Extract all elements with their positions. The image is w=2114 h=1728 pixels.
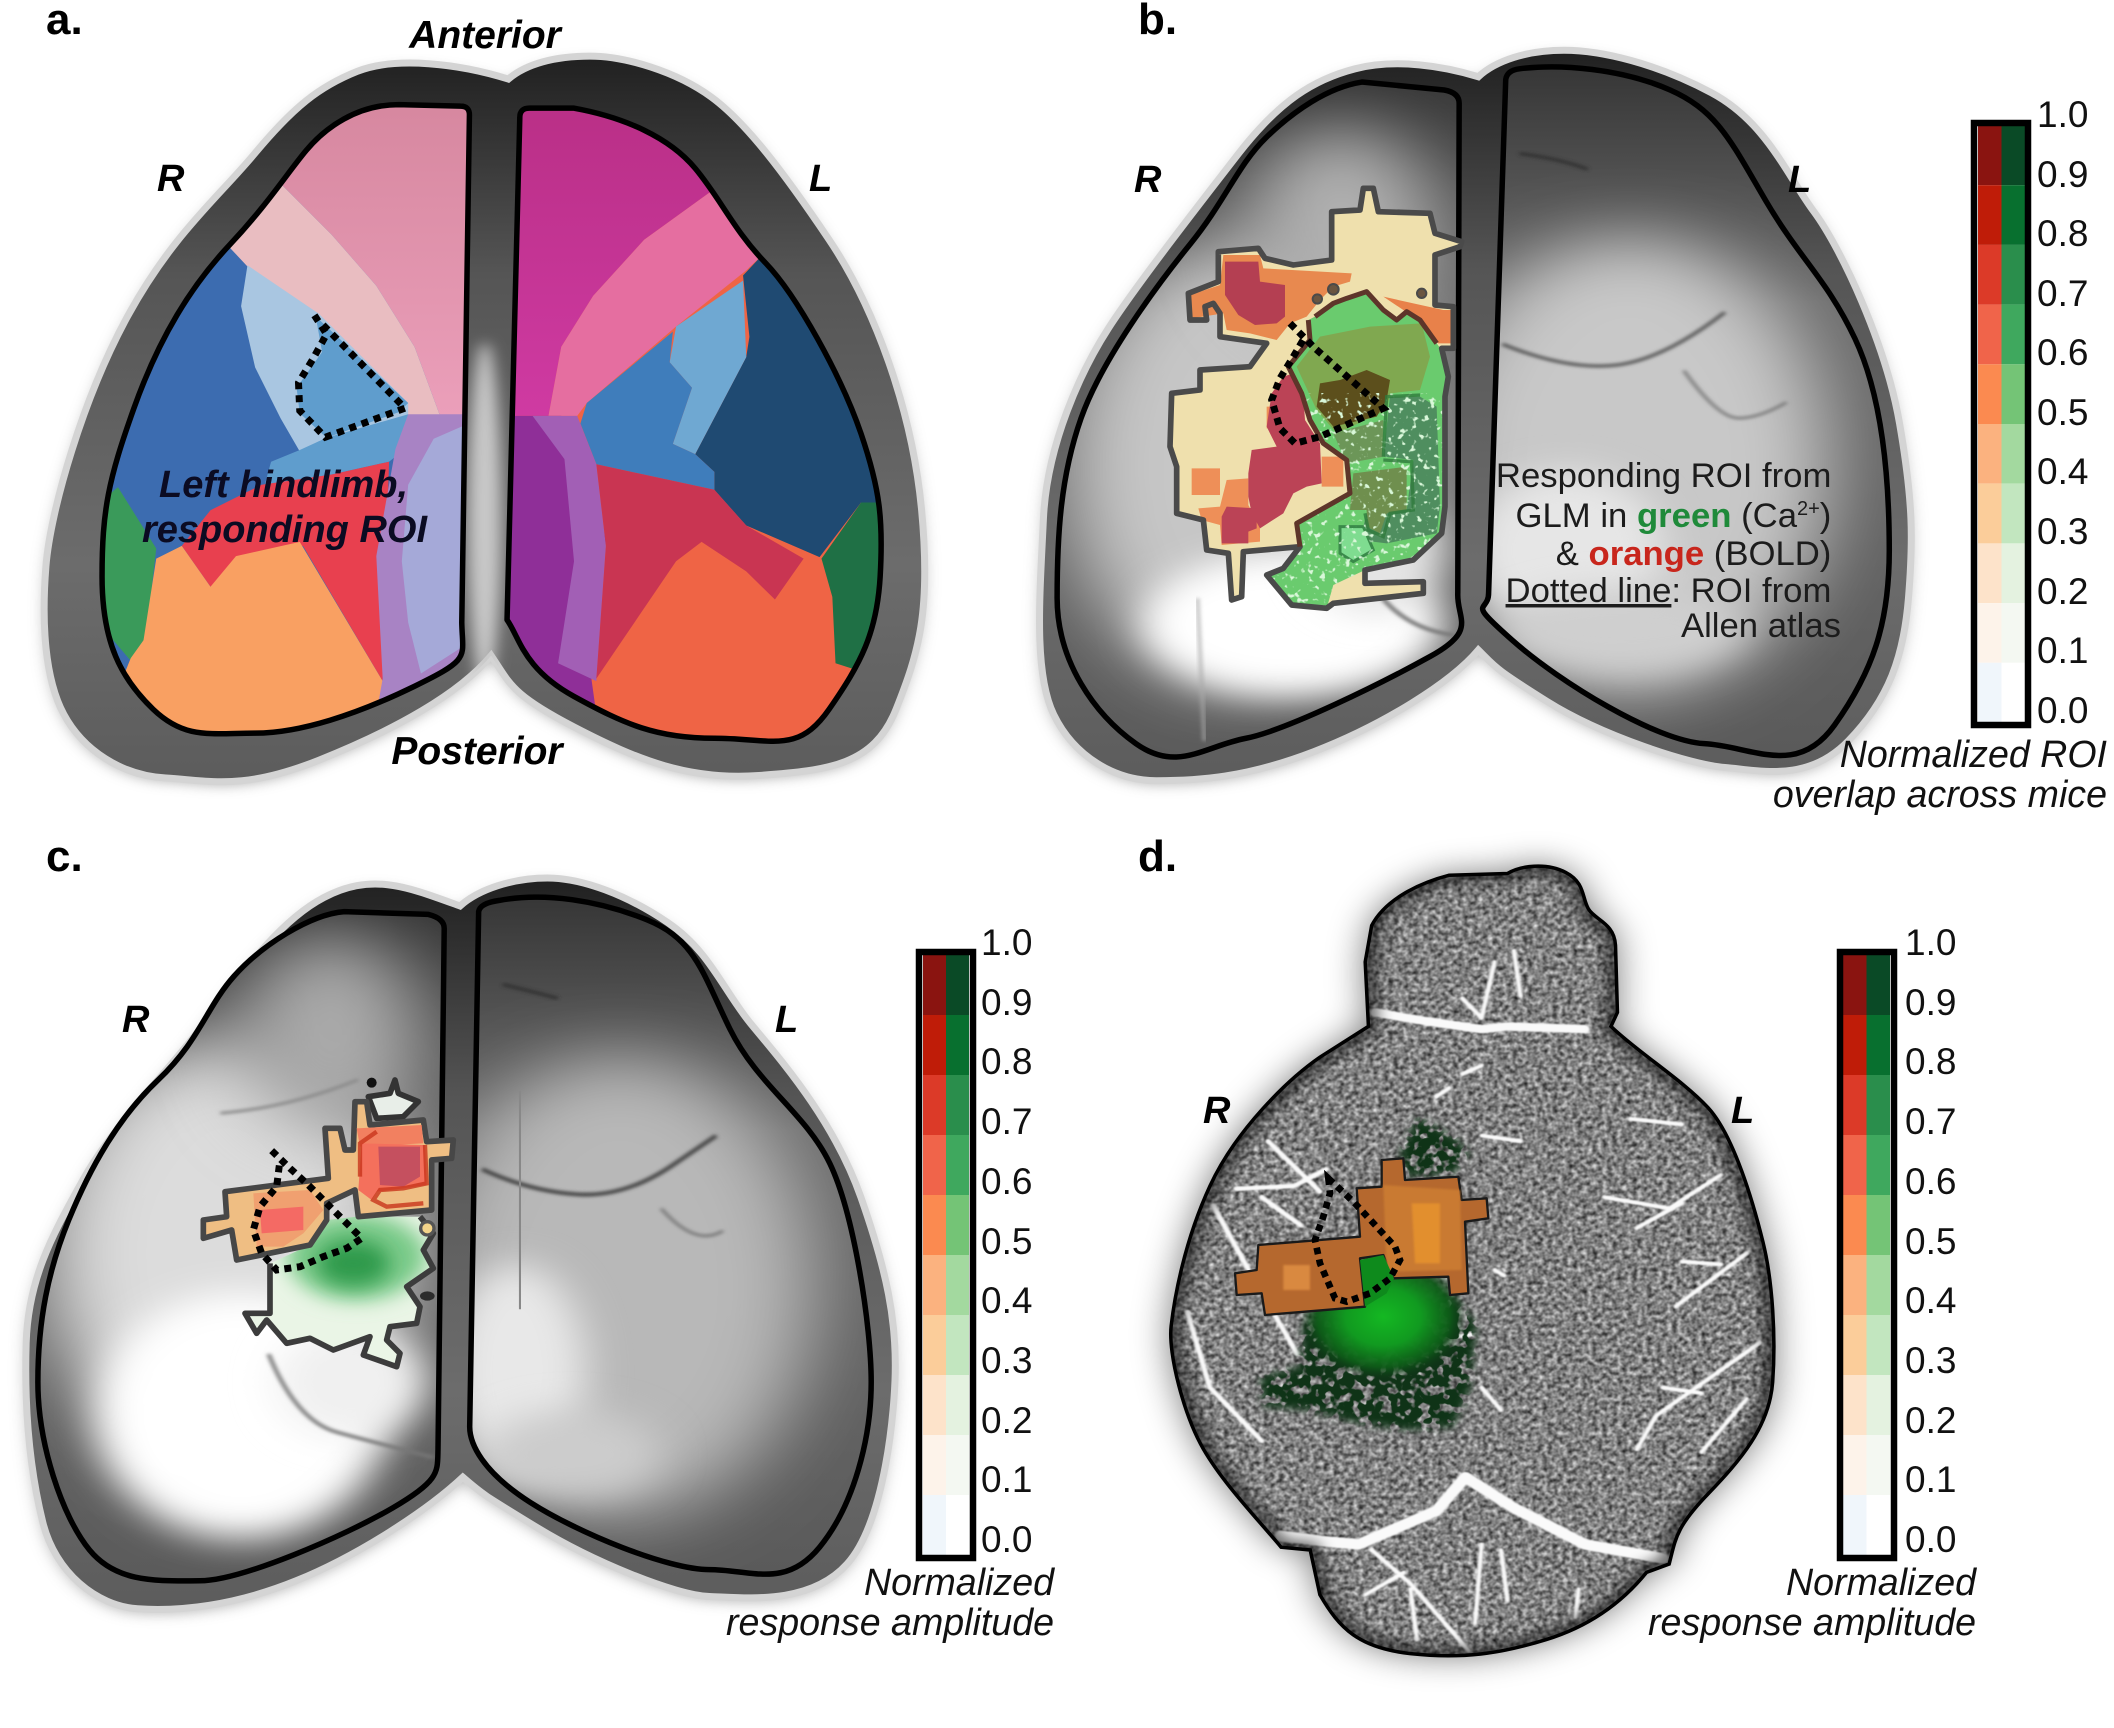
colorbar d: 0.5 <box>1905 1221 1956 1262</box>
calcium ROI map <box>1263 290 1450 610</box>
colorbar c: 0.3 <box>981 1340 1032 1381</box>
ROI overlay c <box>203 1078 453 1370</box>
label: Left hindlimb responding ROI: Left hindlimb, <box>159 464 408 506</box>
colorbar b: 0.0 <box>2037 690 2088 731</box>
colorbar c: 0.4 <box>981 1280 1032 1321</box>
orange BOLD response c <box>203 1102 453 1260</box>
annotation text b: GLM in green (Ca <box>1516 497 1797 535</box>
colorbar caption c: response amplitude <box>726 1601 1054 1643</box>
shadow b <box>1040 55 1911 785</box>
dotted ROI c <box>253 1151 362 1270</box>
colorbar caption d: response amplitude <box>1648 1601 1976 1643</box>
annotation text b: Responding ROI from <box>1496 457 1831 495</box>
colorbar caption b: Normalized ROI <box>1840 733 2108 775</box>
annotation text b: Allen atlas <box>1681 607 1841 645</box>
dotted ROI b <box>1272 323 1383 443</box>
colorbar d: 0.7 <box>1905 1101 1956 1142</box>
panel c: response amplitude on widefield <box>21 878 1055 1643</box>
brain image c <box>21 878 895 1614</box>
label L: L <box>809 158 832 200</box>
colorbar caption d: Normalized <box>1786 1561 1977 1603</box>
colorbar b: 1.0 <box>2037 94 2088 135</box>
colorbar c: 0.1 <box>981 1459 1032 1500</box>
top pale patch c <box>367 1078 418 1118</box>
colorbar b: 0.8 <box>2037 213 2088 254</box>
label R: R <box>1203 1090 1231 1132</box>
MRI brain group <box>1158 856 1786 1668</box>
small brown spots <box>1313 284 1426 304</box>
colorbar c: 0.6 <box>981 1161 1032 1202</box>
atlas hemisphere outlines <box>102 105 881 741</box>
hemisphere outlines b <box>1057 67 1889 757</box>
colorbar d <box>1840 922 1956 1560</box>
label R: R <box>1134 159 1162 201</box>
left hemisphere regions <box>510 110 878 738</box>
colorbar b: 0.9 <box>2037 154 2088 195</box>
label L: L <box>1731 1090 1754 1132</box>
annotation text b: 2+ <box>1797 498 1820 520</box>
panel d: MRI response map <box>1158 856 1977 1668</box>
annotation text b: Dotted line: ROI from <box>1506 572 1831 610</box>
label L: L <box>775 999 798 1041</box>
colorbar c: 0.0 <box>981 1519 1032 1560</box>
annotation text b: & orange (BOLD) <box>1556 535 1831 573</box>
colorbar d: 0.4 <box>1905 1280 1956 1321</box>
colorbar c: 0.5 <box>981 1221 1032 1262</box>
label Posterior: Posterior <box>391 730 564 773</box>
panel b: ROI overlap <box>1040 50 2108 815</box>
panel label d: d. <box>1138 832 1177 881</box>
colorbar b: 0.2 <box>2037 571 2088 612</box>
shadow c <box>26 882 895 1614</box>
green calcium peak d <box>1300 1253 1467 1380</box>
ROI overlay d <box>1235 1110 1488 1437</box>
colorbar b: 0.6 <box>2037 332 2088 373</box>
colorbar b: 0.3 <box>2037 511 2088 552</box>
brain image b <box>1040 50 1911 785</box>
label Anterior: Anterior <box>408 14 563 57</box>
dotted ROI d <box>1315 1178 1400 1302</box>
colorbar caption b: overlap across mice <box>1773 773 2107 815</box>
BOLD ROI map <box>1170 188 1462 608</box>
orange BOLD response d <box>1235 1158 1488 1315</box>
shadow d <box>1171 866 1774 1656</box>
green calcium response c <box>240 1213 440 1370</box>
colorbar b <box>1974 94 2088 731</box>
ROI outline gray <box>1170 188 1462 608</box>
brain outline a <box>44 56 925 782</box>
colorbar d: 0.0 <box>1905 1519 1956 1560</box>
panel a: atlas parcellation <box>44 14 925 786</box>
dark green inner contour <box>1365 395 1420 537</box>
colorbar c: 0.9 <box>981 982 1032 1023</box>
green ROI boundary <box>1288 292 1437 547</box>
colorbar d: 0.1 <box>1905 1459 1956 1500</box>
colorbar d: 0.3 <box>1905 1340 1956 1381</box>
left hemisphere image b <box>1485 70 1884 725</box>
colorbar b: 0.7 <box>2037 273 2088 314</box>
colorbar d: 0.6 <box>1905 1161 1956 1202</box>
ROI overlay b <box>1170 188 1462 610</box>
colorbar c: 0.8 <box>981 1041 1032 1082</box>
brain outline c <box>26 878 895 1609</box>
right hemisphere image b <box>1060 85 1459 742</box>
colorbar d: 0.2 <box>1905 1400 1956 1441</box>
dark speckled response area <box>1253 1110 1487 1437</box>
brain with atlas regions a <box>44 56 925 786</box>
shadow a <box>44 60 925 786</box>
brain outline b <box>1040 50 1911 781</box>
label R: R <box>122 999 150 1041</box>
MRI outline d <box>1171 866 1774 1656</box>
colorbar d: 0.8 <box>1905 1041 1956 1082</box>
panel label c: c. <box>46 832 83 881</box>
label: Left hindlimb responding ROI: responding ROI <box>142 509 428 551</box>
hemisphere outlines c <box>38 897 871 1581</box>
colorbar c: 0.2 <box>981 1400 1032 1441</box>
annotation text b: ) <box>1820 497 1831 535</box>
colorbar b: 0.5 <box>2037 392 2088 433</box>
colorbar caption c: Normalized <box>864 1561 1055 1603</box>
colorbar d: 0.9 <box>1905 982 1956 1023</box>
label R: R <box>157 158 185 200</box>
MRI brain image <box>1158 856 1786 1668</box>
colorbar c: 1.0 <box>981 922 1032 963</box>
colorbar d: 1.0 <box>1905 922 1956 963</box>
dotted ROI a <box>298 315 405 437</box>
colorbar b: 0.1 <box>2037 630 2088 671</box>
right hemisphere regions <box>104 108 467 731</box>
label L: L <box>1788 159 1811 201</box>
colorbar c <box>919 922 1032 1560</box>
left hemisphere image c <box>472 900 868 1546</box>
midline light strip <box>468 342 501 689</box>
right hemisphere image c <box>41 914 442 1560</box>
colorbar b: 0.4 <box>2037 451 2088 492</box>
colorbar c: 0.7 <box>981 1101 1032 1142</box>
